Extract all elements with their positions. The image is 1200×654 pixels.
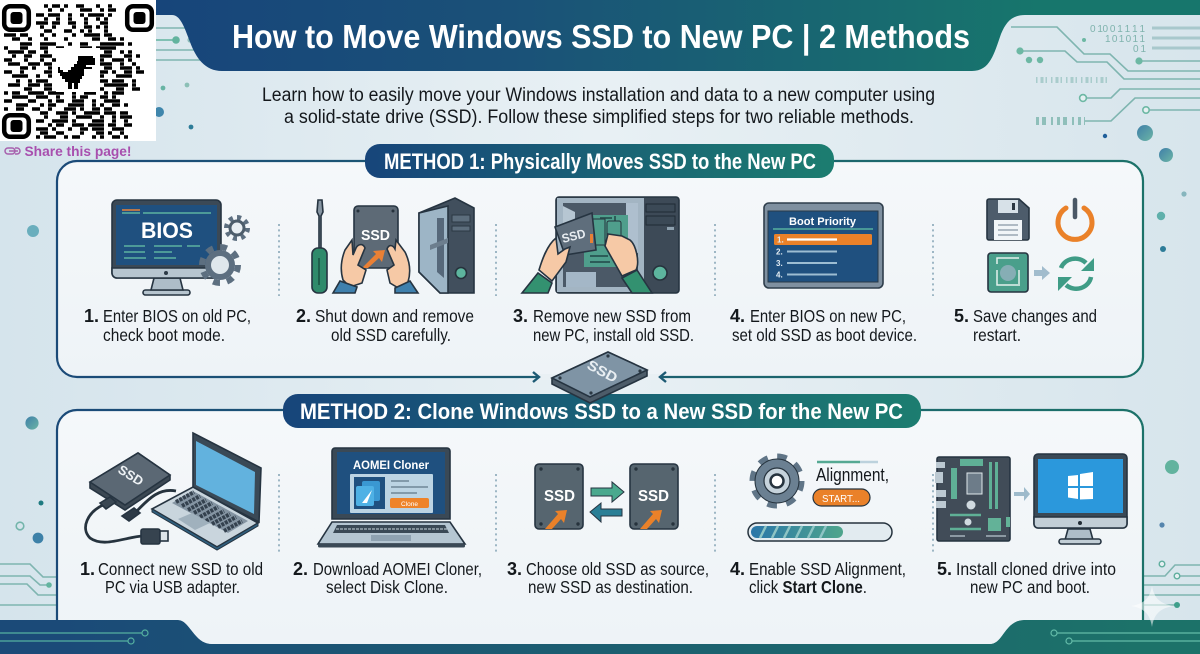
QR code	[0, 0, 156, 141]
intro text: Learn how to easily move your Windows installation and data to a new computer using	[262, 85, 935, 106]
icon: motherboard and Windows monitor	[935, 454, 1127, 544]
circuit decoration: top right: 0 10 0 1 1 1 1	[1090, 24, 1145, 35]
icon: boot priority screen: 4.	[776, 270, 783, 280]
step 4 text: 4.	[730, 306, 745, 326]
step 4 text	[730, 306, 917, 345]
step 4 text: 4.	[730, 559, 745, 579]
step 5 text: Save changes and	[973, 306, 1097, 326]
step 3 text: Choose old SSD as source,	[526, 559, 709, 579]
icon: boot priority screen: 3.	[776, 259, 783, 268]
step 1 text	[84, 306, 251, 345]
step 3 text: 3.	[513, 306, 528, 326]
step 2 text: Shut down and remove	[315, 306, 474, 326]
icon: swapping SSD inside PC case: SSD	[560, 227, 587, 246]
step 3 text: Remove new SSD from	[533, 306, 691, 326]
step 5 text: new PC and boot.	[970, 577, 1090, 597]
bottom bands	[0, 620, 1200, 654]
icon: BIOS monitor	[112, 200, 248, 295]
arrows toward SSD	[533, 372, 666, 382]
icon: BIOS monitor: BIOS	[141, 218, 193, 243]
step 3 text	[513, 306, 694, 345]
step 4 text	[730, 559, 906, 597]
step 1 text: PC via USB adapter.	[105, 577, 240, 597]
icon: alignment gear, start button, progress bar: Alignment,	[816, 465, 889, 485]
icon: boot priority screen: 2.	[776, 248, 783, 256]
circuit decoration: top right	[1011, 24, 1200, 252]
heading: method 1: METHOD 1: Physically Moves SSD to the New PC	[384, 149, 816, 174]
icon: alignment gear, start button, progress bar	[748, 457, 892, 541]
icon: source and destination SSDs: SSD	[638, 488, 669, 505]
icon: central SSD: SSD	[585, 357, 620, 386]
icon: boot priority screen	[764, 203, 883, 288]
step 3 text	[507, 559, 709, 597]
step 4 text: click Start Clone.	[749, 577, 867, 597]
step 1 text: 1.	[80, 559, 95, 579]
step 2 text: Download AOMEI Cloner,	[313, 559, 482, 579]
step 1 text: Connect new SSD to old	[98, 559, 263, 579]
intro text	[262, 85, 935, 128]
step 5 text: 5.	[937, 559, 952, 579]
icon: dinosaur	[58, 56, 95, 89]
icon: source and destination SSDs	[535, 464, 678, 529]
circuit decoration: top right: 1 0 1 0 1 1	[1105, 34, 1145, 45]
step 1 text: 1.	[84, 306, 99, 326]
icon: save and restart	[987, 199, 1094, 292]
icon: alignment gear, start button, progress bar: START...	[822, 494, 860, 505]
icon: SSD connected to laptop	[86, 433, 261, 550]
step 2 text: old SSD carefully.	[331, 325, 451, 345]
icon: source and destination SSDs: SSD	[544, 488, 575, 505]
icon: screwdriver, SSD in hands, PC tower	[312, 198, 474, 293]
icon: AOMEI Cloner laptop	[318, 448, 465, 548]
icon: SSD connected to laptop: SSD	[115, 462, 146, 489]
step 1 text: Enter BIOS on old PC,	[103, 306, 251, 326]
title: How to Move Windows SSD to New PC | 2 Methods	[232, 18, 970, 55]
step 5 text: restart.	[973, 325, 1021, 345]
panel: method 2	[57, 410, 1143, 644]
step 5 text	[954, 306, 1097, 345]
icon: swapping SSD inside PC case	[522, 197, 679, 293]
step 1 text: check boot mode.	[103, 325, 225, 345]
step 3 text: 3.	[507, 559, 522, 579]
icon: screwdriver, SSD in hands, PC tower: SSD	[361, 228, 390, 244]
step 2 text	[296, 306, 474, 345]
step 2 text: 2.	[293, 559, 308, 579]
heading: method 2: METHOD 2: Clone Windows SSD to a New SSD for the New PC	[300, 399, 903, 424]
icon: boot priority screen: Boot Priority	[789, 216, 857, 228]
step 4 text: set old SSD as boot device.	[732, 325, 917, 345]
step 5 text: 5.	[954, 306, 969, 326]
step 3 text: new SSD as destination.	[528, 577, 693, 597]
step 4 text: Enable SSD Alignment,	[749, 559, 906, 579]
icon: AOMEI Cloner laptop: Clone	[401, 501, 418, 508]
step 4 text: Enter BIOS on new PC,	[750, 306, 906, 326]
step 5 text: Install cloned drive into	[956, 559, 1116, 579]
intro text: a solid-state drive (SSD). Follow these simplified steps for two reliable methods.	[284, 107, 914, 128]
circuit decoration: top right: 0 1	[1133, 44, 1146, 55]
step 2 text	[293, 559, 482, 597]
step 2 text: 2.	[296, 306, 311, 326]
icon: central SSD	[552, 352, 647, 403]
step 3 text: new PC, install old SSD.	[533, 325, 694, 345]
step 2 text: select Disk Clone.	[326, 577, 448, 597]
icon: AOMEI Cloner laptop: AOMEI Cloner	[353, 458, 429, 472]
heading: method 1	[365, 144, 834, 178]
icon: boot priority screen: 1.	[777, 236, 784, 244]
heading: method 2	[283, 394, 921, 428]
panel: method 1	[57, 144, 1143, 377]
sparkle watermark	[1131, 586, 1174, 627]
share link label: Share this page!	[24, 143, 132, 159]
step 1 text	[80, 559, 263, 597]
step 5 text	[937, 559, 1116, 597]
header banner	[156, 0, 1200, 71]
